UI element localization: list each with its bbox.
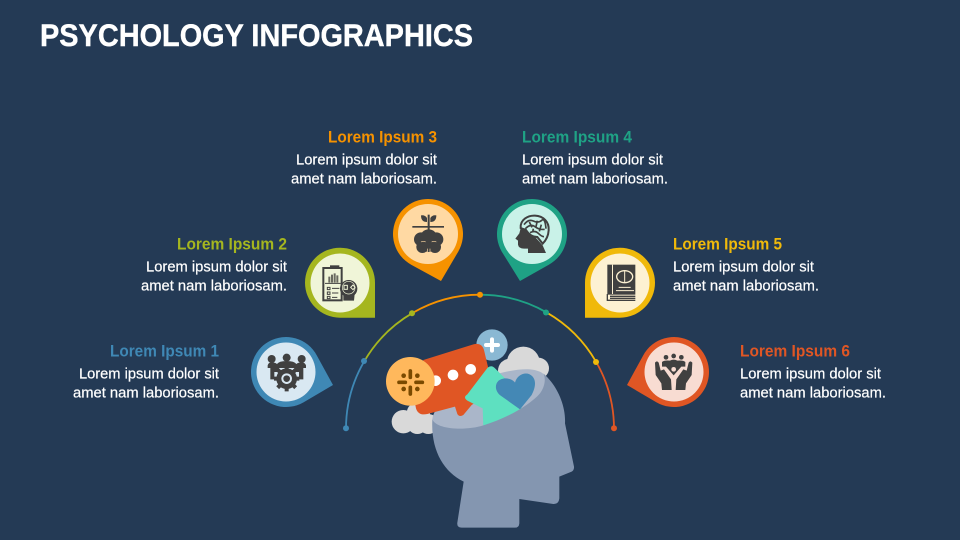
pin 4 [497,199,567,281]
icon: brain with sprout [412,215,444,254]
text block 6: amet nam laboriosam. [740,384,886,402]
icon: psychology book [607,265,635,300]
head illustration [386,329,574,528]
head silhouette [432,373,574,528]
text block 5: Lorem Ipsum 5 [673,236,782,254]
text block 1: Lorem Ipsum 1 [110,342,219,360]
text block 2: Lorem ipsum dolor sit [146,258,288,276]
text block 3: Lorem Ipsum 3 [328,128,437,146]
icon: team gear [268,354,306,391]
text block 6: Lorem ipsum dolor sit [740,366,882,382]
pin 2 [305,248,375,318]
text block 3: Lorem ipsum dolor sit [296,152,438,168]
text block 2: Lorem Ipsum 2 [177,236,287,254]
text block 5: amet nam laboriosam. [673,278,819,294]
star shape [465,366,523,427]
text block 1: amet nam laboriosam. [73,384,219,402]
clouds [392,347,549,434]
pin 1 [251,337,333,407]
text block 4: Lorem Ipsum 4 [522,128,633,146]
text block 6: Lorem Ipsum 6 [740,342,850,360]
icon: clipboard with head [323,265,357,301]
plus bubble [476,329,508,361]
text block 2 [141,236,288,294]
text block 3: amet nam laboriosam. [291,170,437,188]
pin 3 [393,199,463,281]
head opening [432,369,546,429]
heart [496,374,535,409]
text block 3 [291,128,438,188]
orange circle icon [386,357,435,406]
text block 5: Lorem ipsum dolor sit [673,258,815,276]
pin 6 [627,337,709,407]
text block 1: Lorem ipsum dolor sit [79,366,220,382]
text block 4: amet nam laboriosam. [522,170,668,188]
text block 5 [673,236,819,294]
speech bubble [415,344,488,416]
icon: hands holding people [655,354,692,390]
icon: head with brain [515,216,549,253]
arc timeline [343,292,617,431]
text block 1 [73,342,220,402]
text block 4 [522,128,668,188]
title: PSYCHOLOGY INFOGRAPHICS [40,17,473,53]
text block 4: Lorem ipsum dolor sit [522,152,664,168]
pin 5 [585,248,655,318]
text block 2: amet nam laboriosam. [141,278,287,294]
text block 6 [740,342,886,402]
